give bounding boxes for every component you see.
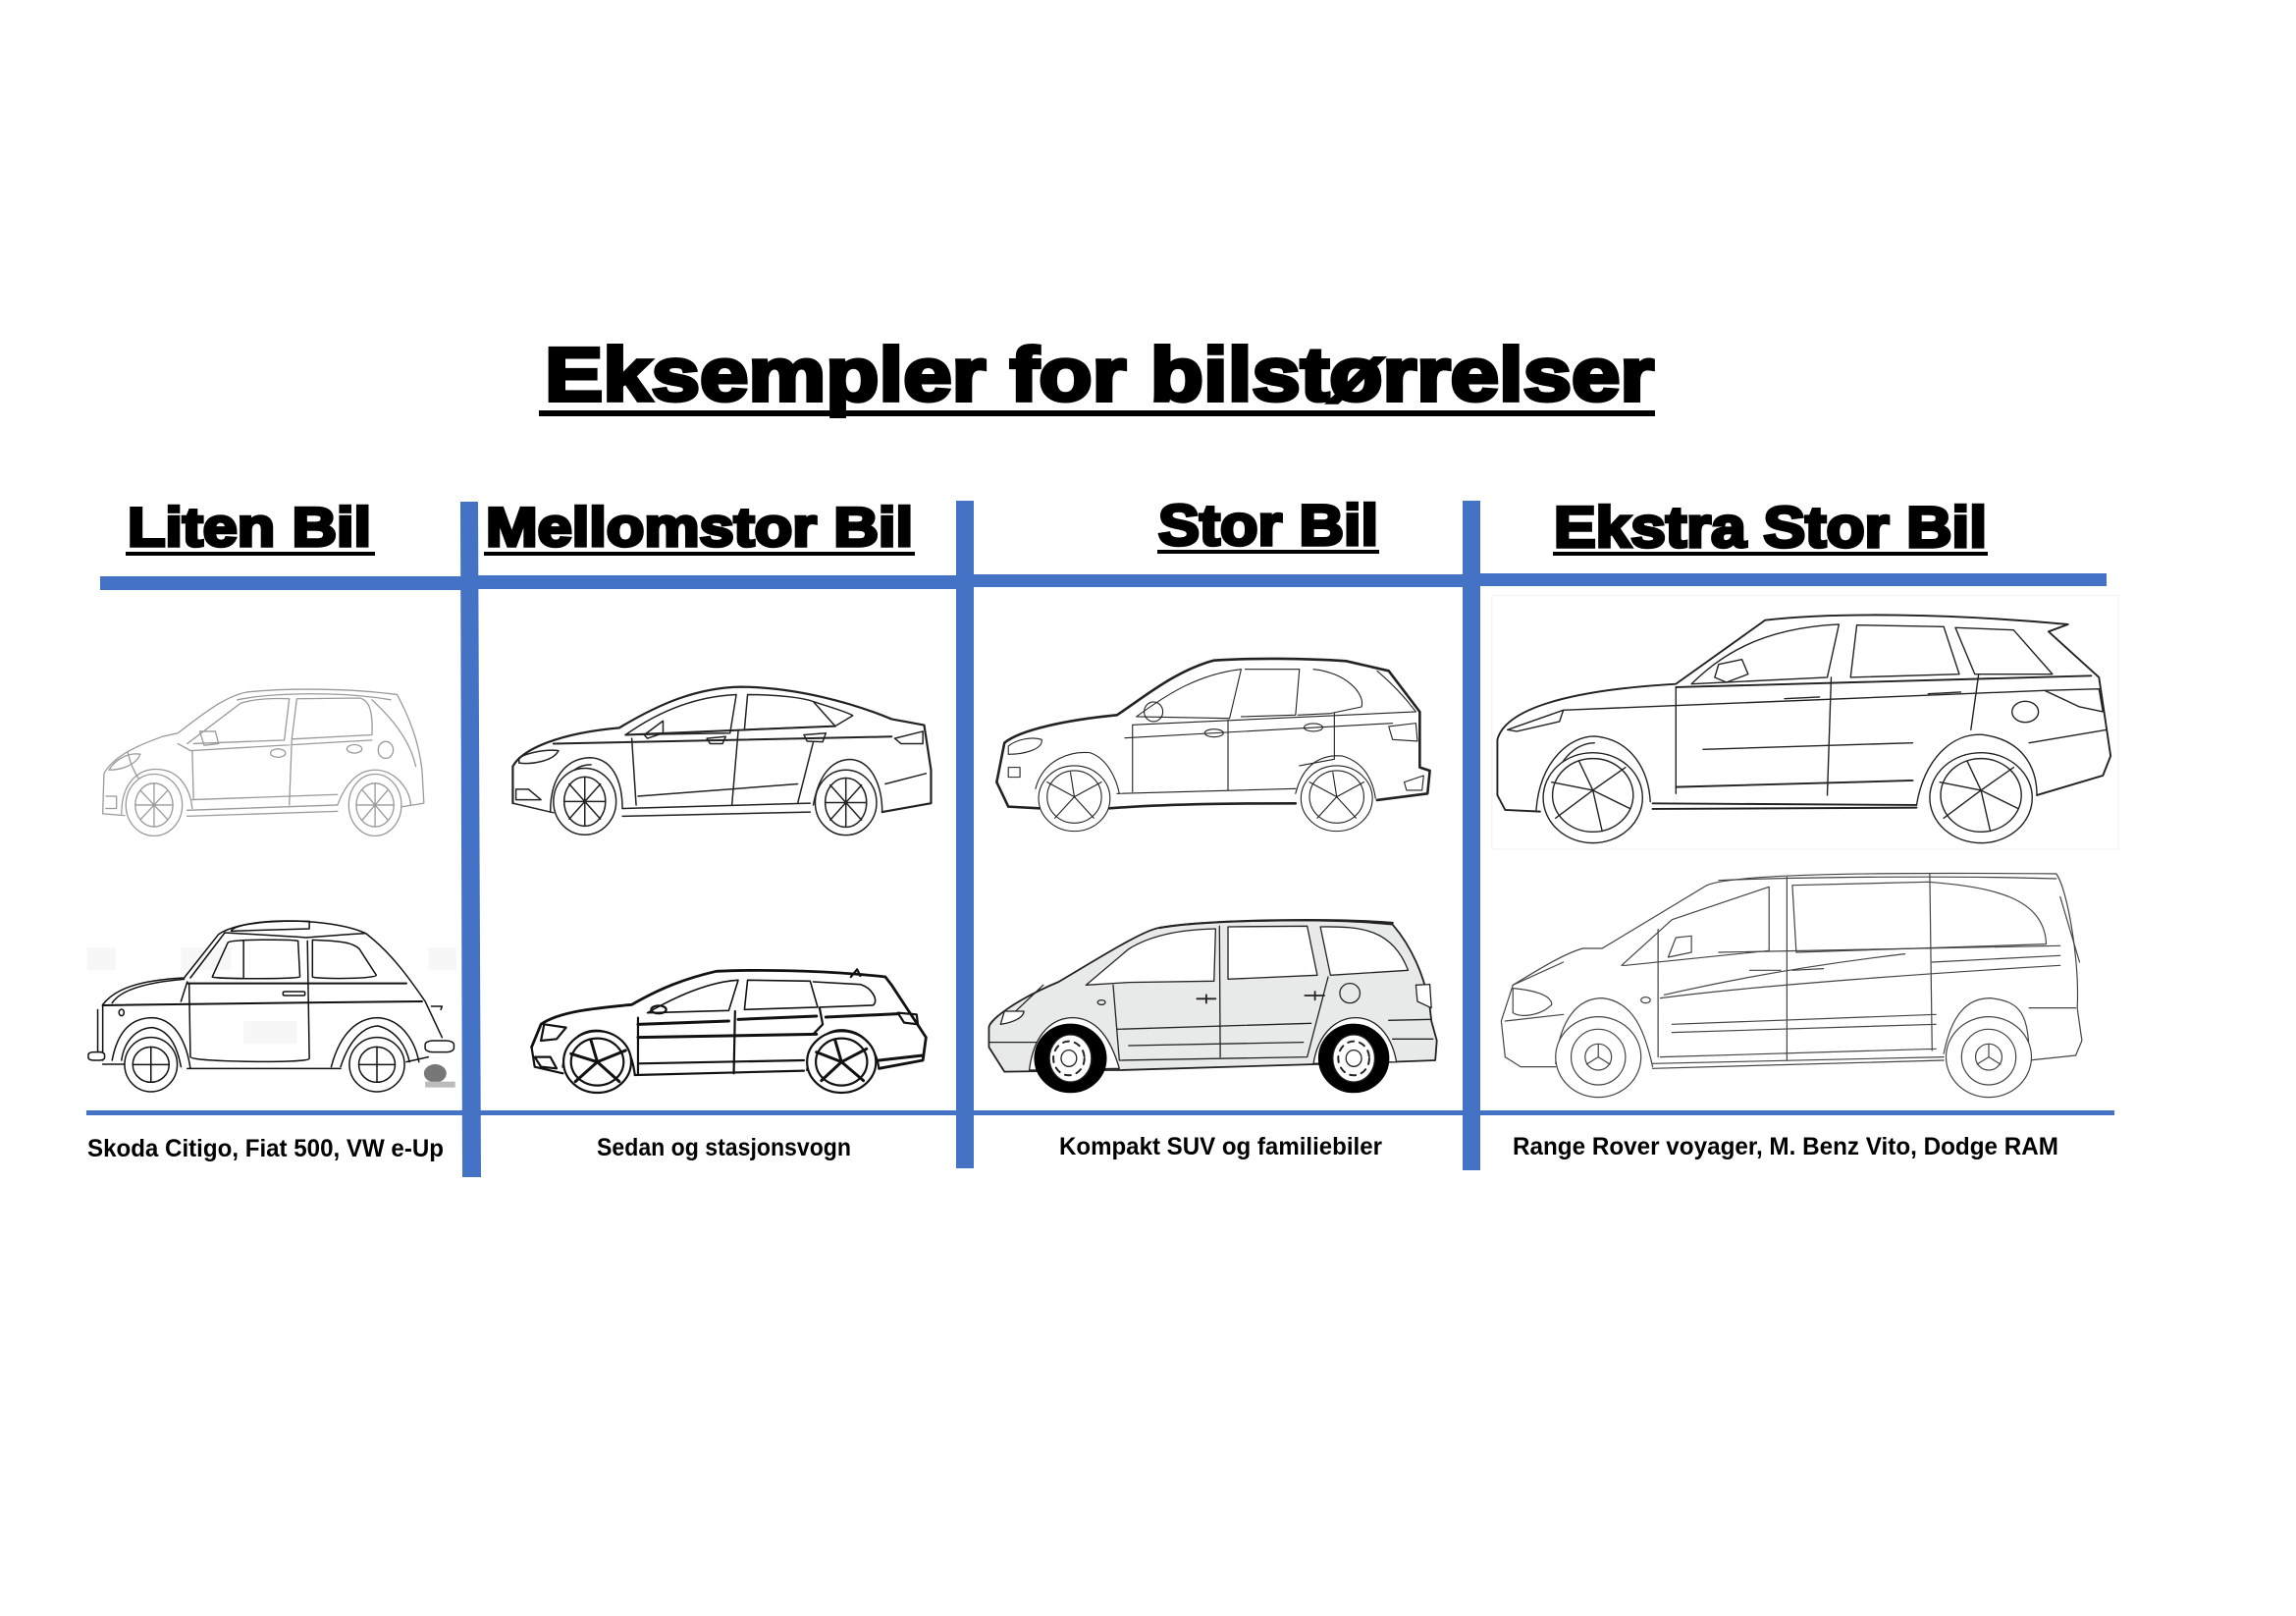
caption: large cars: Kompakt SUV og familiebiler bbox=[1059, 1133, 1382, 1160]
car: large SUV bbox=[1492, 596, 2118, 849]
caption: medium cars: Sedan og stasjonsvogn bbox=[597, 1134, 851, 1161]
heading: Ekstra Stor Bil: Ekstra Stor Bil bbox=[1554, 496, 1987, 560]
car: station wagon bbox=[532, 969, 926, 1093]
car: dark sedan bbox=[512, 687, 931, 835]
title: Eksempler for bilstørrelser bbox=[545, 333, 1654, 417]
car: Mercedes Vito style van bbox=[1501, 873, 2082, 1098]
heading: Stor Bil: Stor Bil bbox=[1158, 494, 1378, 558]
car: compact SUV bbox=[996, 659, 1430, 832]
heading: Liten Bil: Liten Bil bbox=[128, 496, 371, 558]
caption: extra large cars: Range Rover voyager, M. Benz Vito, Dodge RAM bbox=[1513, 1133, 2058, 1160]
car: Fiat 500 style bbox=[87, 921, 456, 1092]
table grid lines bbox=[86, 501, 2114, 1177]
heading: Mellomstor Bil: Mellomstor Bil bbox=[486, 496, 913, 558]
car: light grey small hatchback bbox=[103, 689, 424, 835]
car: grey family minivan bbox=[988, 920, 1437, 1093]
caption: small cars: Skoda Citigo, Fiat 500, VW e-Up bbox=[87, 1135, 444, 1162]
